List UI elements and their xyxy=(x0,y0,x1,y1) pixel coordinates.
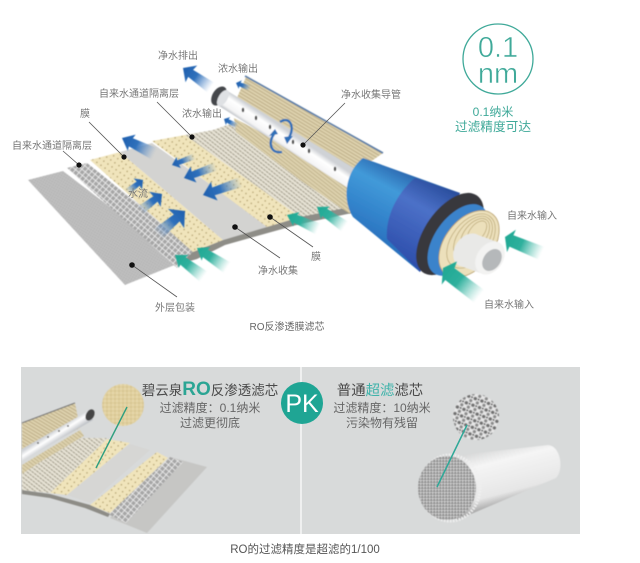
heading: RO: 碧云泉RO反渗透滤芯 xyxy=(142,379,278,400)
precision text: 过滤精度可达 xyxy=(455,119,531,134)
arrow: feed input top xyxy=(500,227,546,265)
illustration: RO layers xyxy=(22,403,207,533)
spec: UF: 污染物有残留 xyxy=(346,415,418,430)
arrow: concentrate upper xyxy=(234,79,252,92)
footer caption: RO的过滤精度是超滤的1/100 xyxy=(230,542,380,556)
layer: outer wrap xyxy=(28,171,182,285)
labels: 浓水输出 xyxy=(218,62,258,75)
white inner tube xyxy=(447,228,511,280)
artwork: unrolled filter layers xyxy=(28,122,352,285)
arrow: concentrate lower xyxy=(222,115,240,130)
leader lines xyxy=(63,102,345,297)
heading: UF: 普通超滤滤芯 xyxy=(337,382,423,399)
icon: membrane magnified xyxy=(102,384,144,426)
illustration: UF cartridge xyxy=(418,445,560,521)
spec: RO: 过滤精度：0.1纳米 xyxy=(160,400,260,415)
badge: 0.1 nm: 0.1 xyxy=(478,32,518,64)
badge: PK: PK xyxy=(285,390,319,418)
arrow: up 2 xyxy=(135,186,168,218)
spec: RO xyxy=(160,400,260,430)
precision text: 0.1纳米 xyxy=(473,105,513,119)
wound membrane lower xyxy=(234,118,352,214)
layer: second spacer xyxy=(185,122,352,217)
labels: 浓水输出 xyxy=(182,107,222,120)
spec: RO: 过滤更彻底 xyxy=(180,415,240,430)
arrow: feed 2 xyxy=(193,241,232,274)
layer: front edge xyxy=(180,207,352,264)
arrow: up 3 xyxy=(149,201,193,244)
labels: 外层包装 xyxy=(155,301,195,314)
labels: 水流 xyxy=(128,187,148,200)
labels: 自来水通道隔离层 xyxy=(99,87,179,100)
pointer line xyxy=(96,407,127,468)
labels: 自来水通道隔离层 xyxy=(12,139,92,152)
arrow: feed input bottom xyxy=(435,257,488,307)
pointer line xyxy=(437,425,467,487)
badge: 0.1 nm: nm xyxy=(478,58,518,90)
labels: 净水收集 xyxy=(258,264,298,277)
caption: RO反渗透膜滤芯 xyxy=(250,320,324,333)
icon: pores magnified xyxy=(453,394,499,440)
diagram: RO membrane cartridge xyxy=(12,49,557,333)
artwork: wound membrane and pipe xyxy=(208,76,511,289)
layer: membrane xyxy=(90,152,223,252)
arrow: feed 1 xyxy=(170,249,209,283)
spec: UF xyxy=(333,400,431,430)
badge: PK xyxy=(281,382,323,424)
labels: 膜 xyxy=(80,108,90,120)
arrow: inward 2 xyxy=(181,158,219,186)
blue edge line xyxy=(245,76,383,153)
flow arrows xyxy=(118,60,546,307)
collection pipe xyxy=(208,84,357,188)
arrow: feed 4 xyxy=(313,201,349,233)
layer: second membrane xyxy=(152,135,300,227)
arrow: inward 3 xyxy=(200,173,244,204)
spec: UF: 过滤精度：10纳米 xyxy=(333,400,431,415)
layer: feed spacer mesh xyxy=(67,163,197,268)
blue cylinder shell xyxy=(347,158,460,272)
labels: 膜 xyxy=(311,251,321,263)
badge: 0.1 nm xyxy=(463,24,533,94)
spiral wound end xyxy=(427,199,511,289)
arrow: purified water out xyxy=(177,60,217,96)
inner blue ring xyxy=(415,193,501,287)
labels: 自来水输入 xyxy=(484,298,534,311)
precision text xyxy=(455,105,531,134)
arrow: permeate along carrier xyxy=(118,130,158,162)
black rubber ring xyxy=(403,181,497,287)
wound membrane upper xyxy=(236,77,383,172)
panel: comparison xyxy=(21,367,580,534)
icon: rotation arrows xyxy=(269,120,293,152)
labels: 自来水输入 xyxy=(507,209,557,222)
layer: permeate carrier xyxy=(120,143,270,240)
labels xyxy=(12,49,557,314)
labels: 净水收集导管 xyxy=(341,88,401,101)
labels: 净水排出 xyxy=(158,49,198,62)
arrow: feed 3 xyxy=(284,208,321,236)
arrow: inward 1 xyxy=(170,151,197,171)
dark blue band xyxy=(387,178,460,272)
arrow: up 1 xyxy=(123,174,147,198)
